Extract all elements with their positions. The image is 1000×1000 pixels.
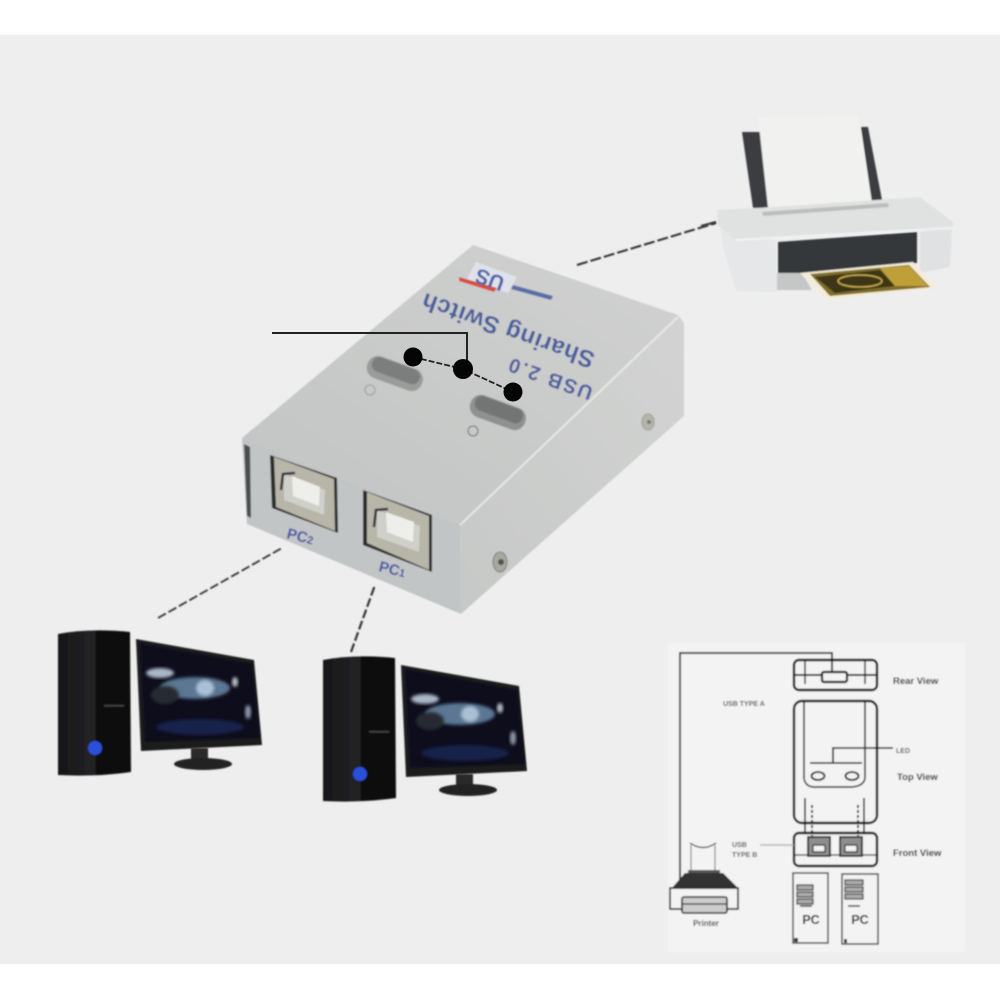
side screw lower — [493, 552, 507, 572]
printer paper support right — [861, 127, 882, 203]
label USB TYPE A: USB TYPE A — [723, 701, 765, 708]
callout: PC2 connection dashed line — [158, 548, 282, 618]
USB sharing switch device — [242, 245, 684, 614]
label PC left: PC — [802, 913, 820, 927]
paper sheet — [758, 115, 872, 208]
PC icon left — [793, 873, 828, 943]
printer left leg — [720, 226, 777, 292]
label Printer: Printer — [693, 919, 719, 928]
label Rear View: Rear View — [893, 676, 939, 687]
callout: PC1 connection dashed line — [351, 585, 375, 652]
selector dot centre — [453, 359, 473, 379]
device top face — [242, 245, 678, 525]
printer cable — [680, 653, 832, 880]
selector dot left — [404, 348, 422, 366]
PC1 USB port — [363, 490, 432, 572]
port label PC1: PC1 — [377, 558, 407, 581]
label Top View: Top View — [897, 772, 938, 783]
product text Sharing Switch: Sharing Switch — [418, 287, 598, 373]
indicator mark 2 — [365, 385, 375, 395]
rear view box — [794, 660, 877, 690]
indicator mark 1 — [468, 426, 478, 436]
computer set PC2 — [58, 630, 262, 776]
label PC right: PC — [851, 913, 869, 927]
selector dot right — [504, 382, 522, 402]
output photo — [800, 262, 938, 300]
stand PC2 — [174, 748, 232, 770]
button 2 — [364, 353, 426, 394]
top view box — [794, 701, 893, 836]
printer icon — [670, 843, 738, 913]
label USB TYPE B: TYPE B — [732, 852, 757, 859]
printer right leg — [920, 226, 952, 273]
label USB TYPE B: USB — [732, 842, 747, 849]
callout: printer connection dashed line — [577, 223, 716, 265]
button 1 — [467, 392, 529, 433]
selector connector dashes — [413, 357, 513, 392]
side screw upper — [642, 414, 654, 430]
PC icon right — [842, 874, 878, 944]
device right side — [460, 315, 684, 614]
computer set PC1 — [323, 656, 527, 802]
switch selector callout line — [272, 333, 467, 369]
printer body top — [717, 197, 953, 240]
monitor PC2 — [136, 639, 262, 751]
monitor PC1 — [401, 665, 527, 777]
front view box — [760, 833, 877, 866]
stand PC1 — [439, 774, 497, 796]
PC2 USB port — [270, 455, 338, 533]
brand logo — [459, 262, 553, 300]
printer output opening — [778, 232, 917, 277]
port label PC2: PC2 — [285, 525, 315, 548]
device front face — [242, 438, 461, 614]
printer paper support left — [742, 132, 769, 208]
printer cable stub — [701, 222, 716, 226]
tower PC2 — [58, 630, 131, 776]
brand logo: US — [472, 263, 508, 295]
label Front View: Front View — [893, 848, 942, 859]
label LED: LED — [896, 748, 910, 755]
printer illustration — [701, 115, 953, 300]
panel: wiring diagram — [668, 643, 965, 952]
model text USB 2.0: USB 2.0 — [504, 352, 596, 404]
tower PC1 — [323, 656, 396, 802]
